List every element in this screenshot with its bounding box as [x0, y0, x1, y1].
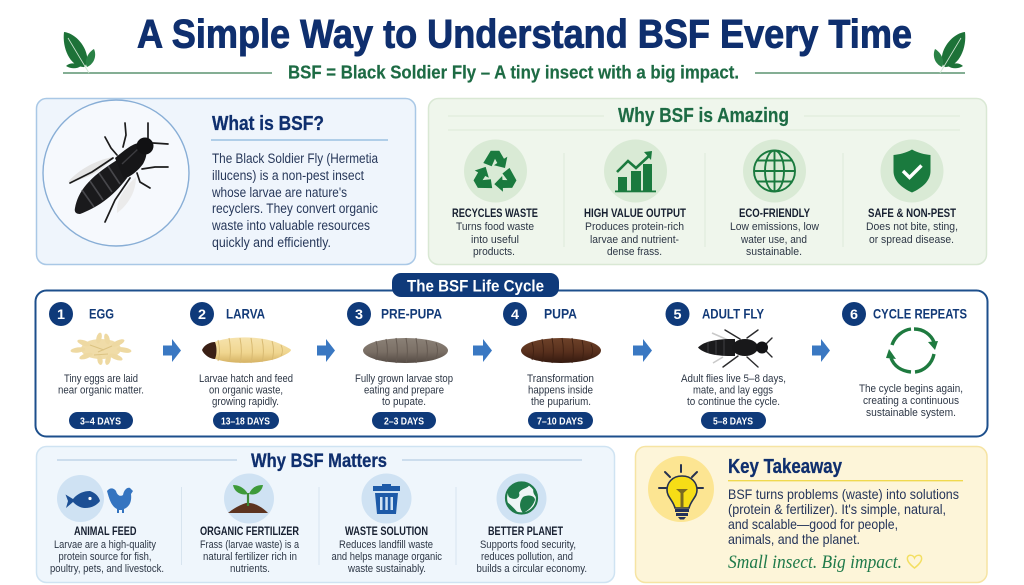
item: animal feed: ANIMAL FEED [74, 526, 136, 538]
text: what is BSF body [211, 151, 378, 250]
arrow 1 [163, 339, 181, 362]
step 4: pupa: 7–10 DAYS [537, 416, 583, 428]
step 4: pupa: 4 [511, 306, 519, 322]
step 5: adult fly: Adult flies live 5–8 days, [681, 373, 786, 385]
step 5: adult fly [666, 302, 786, 429]
step 1: egg: EGG [89, 306, 114, 322]
item: high value output [584, 140, 686, 258]
item: organic fertilizer: ORGANIC FERTILIZER [200, 526, 300, 538]
step 2: larva: growing rapidly. [212, 396, 279, 408]
step 3: pre-pupa: PRE-PUPA [381, 306, 442, 322]
item: safe and non-pest: SAFE & NON-PEST [868, 208, 956, 220]
heading: amazing: Why BSF is Amazing [618, 105, 789, 127]
item: recycles waste [452, 140, 538, 258]
item: better planet: builds a circular economy. [476, 563, 587, 575]
item: animal feed [50, 475, 164, 575]
step 6: cycle repeats: 6 [850, 306, 858, 322]
icon: left leaf [64, 32, 95, 73]
arrow 4 [633, 339, 652, 362]
item: waste solution: WASTE SOLUTION [345, 526, 428, 538]
step 6: cycle repeats: The cycle begins again, [859, 383, 963, 395]
item: organic fertilizer [200, 474, 300, 575]
panel: why BSF is amazing [428, 98, 986, 264]
icon: pupa [521, 338, 601, 363]
icon: cycle arrows [886, 329, 938, 372]
step 3: pre-pupa: 2–3 DAYS [384, 416, 424, 428]
item: organic fertilizer: natural fertilizer rich in [203, 551, 297, 563]
subtitle: BSF = Black Soldier Fly – A tiny insect with a big impact. [288, 62, 739, 82]
item: animal feed: Larvae are a high-quality [54, 539, 156, 551]
item: recycles waste: into useful [471, 234, 519, 246]
item: waste solution: Reduces landfill waste [339, 539, 433, 551]
step 4: pupa: the puparium. [531, 396, 591, 408]
heading: life cycle pill: The BSF Life Cycle [407, 276, 544, 296]
icon: hen [107, 488, 133, 513]
icon: globe [754, 150, 795, 192]
step 1: egg: 3–4 DAYS [80, 416, 121, 428]
step 6: cycle repeats: creating a continuous [863, 395, 959, 407]
text: key takeaway body: BSF turns problems (waste) into solutions [728, 486, 959, 502]
item: high value output: Produces protein-rich [585, 221, 684, 233]
item: waste solution: and helps manage organic [332, 551, 442, 563]
step 4: pupa: PUPA [544, 306, 577, 322]
text: key takeaway body: and scalable—good for people, [728, 516, 898, 532]
item: waste solution: waste sustainably. [347, 563, 426, 575]
step 5: adult fly: ADULT FLY [702, 306, 765, 322]
step 6: cycle repeats: sustainable system. [866, 407, 956, 419]
panel: key takeaway [636, 446, 987, 582]
text: key takeaway body [728, 486, 959, 547]
step 1: egg: near organic matter. [58, 384, 144, 396]
step 4: pupa: happens inside [528, 384, 593, 396]
icon: heart [907, 555, 922, 568]
step 1: egg: Tiny eggs are laid [64, 373, 138, 385]
icon: recycle [470, 151, 520, 195]
item: animal feed: protein source for fish, [58, 551, 152, 563]
heading: key takeaway: Key Takeaway [728, 456, 843, 478]
step 3: pre-pupa: Fully grown larvae stop [355, 373, 453, 385]
text: what is BSF body: waste into valuable resources [211, 218, 370, 233]
step 5: adult fly: mate, and lay eggs [693, 384, 773, 396]
text: what is BSF body: whose larvae are nature's [211, 185, 347, 200]
item: eco-friendly: sustainable. [746, 246, 802, 258]
item: animal feed: poultry, pets, and livestock. [50, 563, 164, 575]
step 3: pre-pupa: eating and prepare [364, 384, 444, 396]
icon: earth [506, 482, 537, 514]
item: eco-friendly: Low emissions, low [730, 221, 819, 233]
item: high value output: dense frass. [607, 246, 662, 258]
step 4: pupa: Transformation [527, 373, 594, 385]
icon: shield [894, 150, 930, 192]
item: safe and non-pest [866, 140, 958, 246]
title: A Simple Way to Understand BSF Every Time [137, 12, 912, 56]
item: waste solution [332, 474, 442, 575]
icon: light bulb [648, 456, 714, 522]
icon: fish [66, 491, 100, 508]
step 3: pre-pupa [347, 302, 453, 429]
item: recycles waste: products. [473, 246, 515, 258]
step 2: larva: 13–18 DAYS [221, 416, 270, 428]
step 3: pre-pupa: 3 [355, 306, 363, 322]
item: recycles waste: Turns food waste [456, 221, 534, 233]
item: organic fertilizer: nutrients. [230, 563, 270, 575]
icon: trash can [373, 484, 400, 514]
item: better planet: BETTER PLANET [488, 526, 563, 538]
arrow 3 [473, 339, 492, 362]
step 6: cycle repeats [842, 302, 967, 419]
item: better planet [476, 474, 587, 575]
step 1: egg [49, 302, 144, 429]
step 5: adult fly: 5 [674, 306, 682, 322]
step 5: adult fly: to continue the cycle. [687, 396, 780, 408]
icon: fly in circle [43, 100, 189, 246]
item: recycles waste: RECYCLES WASTE [452, 208, 538, 220]
text: tagline: Small insect. Big impact. [728, 552, 902, 573]
item: better planet: reduces pollution, and [481, 551, 573, 563]
fly abdomen [75, 160, 127, 214]
arrow 2 [317, 339, 335, 362]
step 5: adult fly: 5–8 DAYS [713, 416, 753, 428]
panel: life cycle [36, 273, 988, 436]
icon: eggs [70, 332, 132, 366]
text: what is BSF body: illucens) is a non-pest insect [212, 168, 364, 183]
icon: growth chart [615, 151, 656, 192]
text: what is BSF body: The Black Soldier Fly (Hermetia [212, 151, 378, 166]
item: eco-friendly: ECO-FRIENDLY [739, 208, 810, 220]
icon: larva [202, 337, 291, 363]
icon: sprout [228, 485, 268, 513]
arrow 5 [812, 339, 830, 362]
text: what is BSF body: recyclers. They convert organic [212, 201, 378, 216]
step 4: pupa [503, 302, 601, 429]
step 2: larva: Larvae hatch and feed [199, 373, 293, 385]
item: safe and non-pest: or spread disease. [869, 234, 954, 246]
step 3: pre-pupa: to pupate. [382, 396, 426, 408]
text: what is BSF body: quickly and efficiently. [212, 235, 331, 250]
item: high value output: larvae and nutrient- [590, 234, 679, 246]
item: eco-friendly: water use, and [740, 234, 807, 246]
step 1: egg: 1 [57, 306, 65, 322]
step 2: larva [190, 302, 293, 429]
item: safe and non-pest: Does not bite, sting, [866, 221, 958, 233]
step 2: larva: 2 [198, 306, 206, 322]
item: eco-friendly [730, 140, 819, 258]
text: key takeaway body: animals, and the planet. [728, 531, 860, 547]
panel: why BSF matters [36, 446, 614, 582]
icon: right leaf [934, 32, 965, 73]
icon: adult fly [698, 330, 772, 367]
step 2: larva: on organic waste, [209, 384, 283, 396]
heading: what is BSF: What is BSF? [212, 113, 324, 135]
step 2: larva: LARVA [226, 306, 265, 322]
step 6: cycle repeats: CYCLE REPEATS [873, 306, 967, 322]
item: better planet: Supports food security, [480, 539, 576, 551]
item: organic fertilizer: Frass (larvae waste) is a [200, 539, 300, 551]
fly thorax [115, 143, 146, 179]
panel: what is BSF [36, 98, 416, 264]
icon: pre-pupa [363, 338, 448, 363]
item: high value output: HIGH VALUE OUTPUT [584, 208, 686, 220]
text: key takeaway body: (protein & fertilizer). It's simple, natural, [728, 501, 946, 517]
heading: matters: Why BSF Matters [251, 451, 387, 472]
